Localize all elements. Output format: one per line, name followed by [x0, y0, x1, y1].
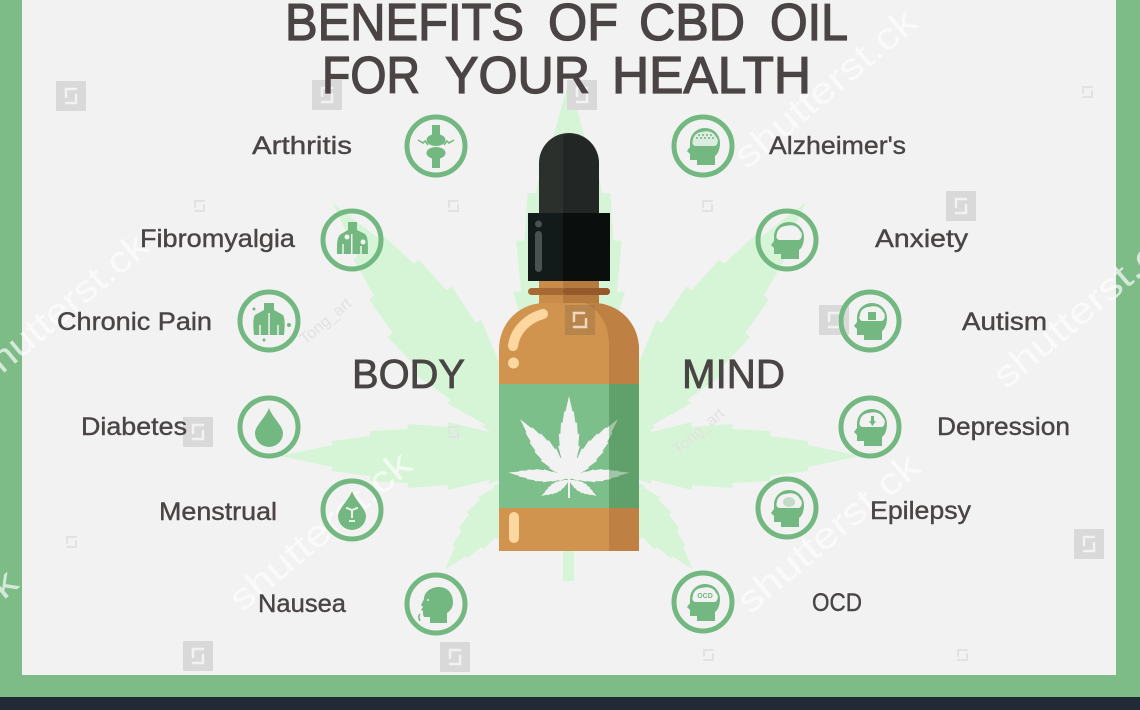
icon: depression head [841, 398, 899, 456]
icon: nausea face [407, 575, 465, 633]
icon: OCD head: OCD [697, 593, 713, 600]
watermarks: shutterst.ck [221, 443, 420, 619]
bottle bulb [539, 133, 599, 213]
title [285, 0, 848, 105]
label: Fibromyalgia: Fibromyalgia [140, 225, 295, 253]
icon: autism head [841, 292, 899, 350]
label: Depression: Depression [937, 413, 1070, 441]
icon: epilepsy head [758, 479, 816, 537]
watermarks: shutterst.ck [726, 0, 925, 176]
watermarks: shutterst.ck [729, 445, 928, 621]
icon: chronic pain torso [240, 292, 298, 350]
label: Nausea: Nausea [258, 590, 346, 618]
bottle label [499, 384, 639, 508]
label: Autism: Autism [962, 308, 1047, 336]
label: Diabetes: Diabetes [81, 413, 187, 441]
icon: menstrual drop [323, 481, 381, 539]
label: Menstrual: Menstrual [159, 498, 277, 526]
watermark on bottle [565, 305, 595, 335]
title: YOUR [445, 47, 590, 105]
icon: arthritis joint [407, 117, 465, 175]
footer bar [0, 697, 1140, 710]
label: Chronic Pain: Chronic Pain [57, 308, 212, 336]
icon: diabetes drop [240, 398, 298, 456]
label leaf [508, 384, 639, 508]
bottle side shading [585, 303, 639, 551]
icon: OCD head [674, 573, 732, 631]
dropper bottle [499, 133, 639, 551]
watermarks: Tong_art [297, 295, 356, 348]
label: Alzheimer's: Alzheimer's [769, 132, 906, 160]
heading: mind: MIND [682, 351, 785, 397]
bottle neck [528, 281, 610, 305]
icon: fibromyalgia torso [323, 211, 381, 269]
bottle body [499, 303, 639, 551]
label: Epilepsy: Epilepsy [870, 497, 972, 525]
icon: anxiety head [758, 211, 816, 269]
background cannabis leaf [280, 80, 860, 584]
heading: body: BODY [352, 351, 465, 397]
label: Anxiety: Anxiety [875, 225, 969, 253]
title: FOR [322, 47, 420, 105]
icon: alzheimer's head [674, 117, 732, 175]
title: HEALTH [612, 47, 811, 105]
watermarks: Tong_art [670, 405, 729, 458]
bottle cap [528, 213, 610, 281]
label: OCD: OCD [812, 589, 862, 617]
label: Arthritis: Arthritis [252, 132, 352, 160]
bottle highlights [508, 314, 543, 543]
